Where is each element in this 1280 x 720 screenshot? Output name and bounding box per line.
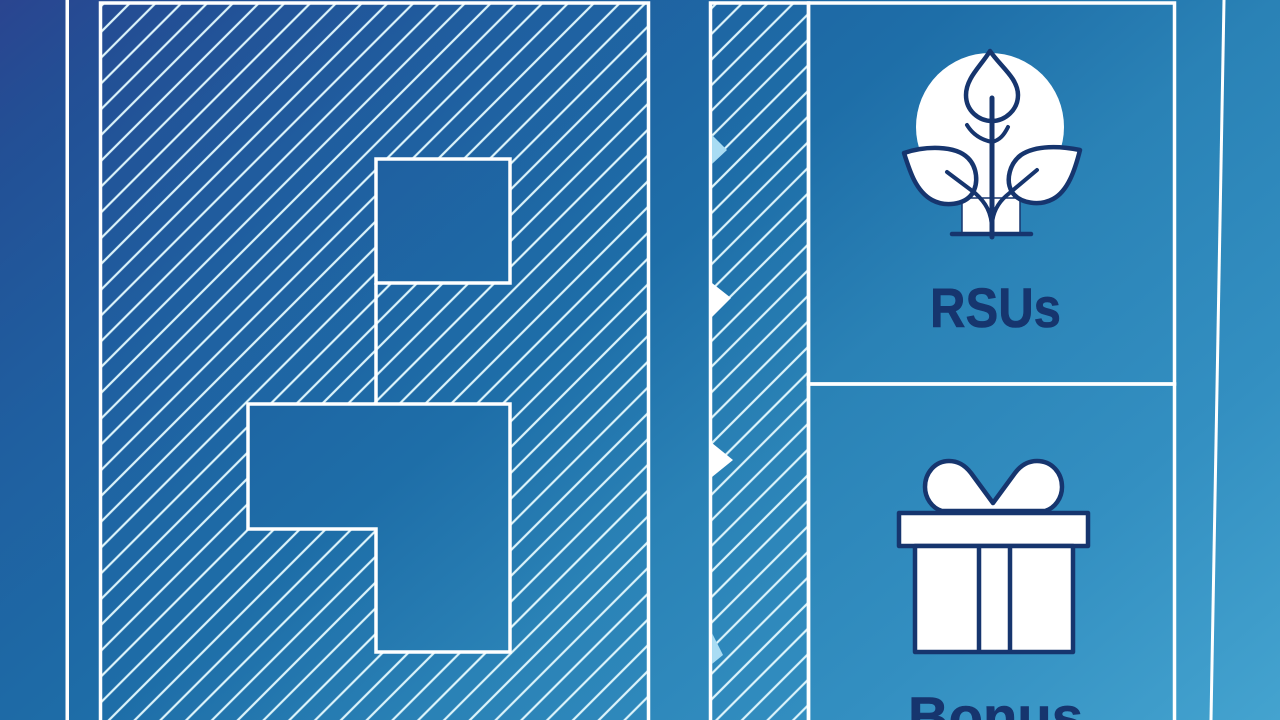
panel: hatched floor plan <box>100 3 649 720</box>
marker: white notch upper <box>712 283 731 317</box>
outer right slanted rule <box>1211 0 1224 720</box>
marker: white notch lower <box>712 443 733 477</box>
label: RSUs: RSUs <box>930 276 1061 339</box>
panel: RSUs <box>808 3 1174 384</box>
panel: Bonus <box>808 384 1174 720</box>
connector line <box>374 283 378 404</box>
panel: hatched side strip <box>710 3 808 720</box>
icon: plant with leaves <box>904 51 1080 237</box>
marker: light blue notch bottom <box>712 633 723 664</box>
cut-out: lower L shape <box>248 404 510 652</box>
marker: light blue notch top <box>712 135 727 164</box>
cut-out: upper square <box>376 159 510 283</box>
icon: gift box <box>899 461 1088 652</box>
outer left rule <box>66 0 69 720</box>
